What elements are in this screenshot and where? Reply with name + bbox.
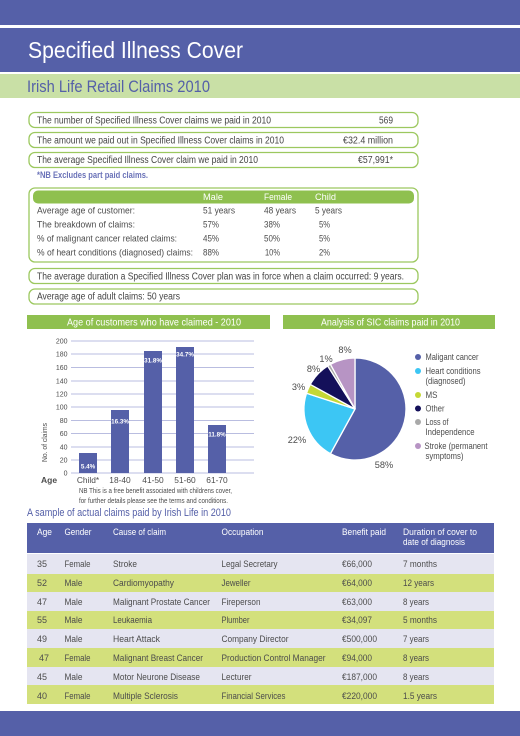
slice: stroke 8% xyxy=(330,358,355,409)
pie labels: 3% xyxy=(292,382,305,392)
row 6: Female xyxy=(64,653,90,664)
row 8: €220,000 xyxy=(342,691,377,702)
title banner: Specified Illness Cover xyxy=(28,37,243,63)
top decorative band xyxy=(0,0,520,25)
row 3: Fireperson xyxy=(222,597,260,608)
row: breakdown xyxy=(37,220,330,230)
bar chart note xyxy=(79,486,232,505)
stat: average adult age xyxy=(29,289,418,304)
stat: number of claims: 569 xyxy=(379,116,393,126)
stat: amount paid xyxy=(29,132,418,148)
row: average age xyxy=(37,206,342,216)
y axis labels: 40 xyxy=(60,444,68,452)
pie labels: 22% xyxy=(288,435,306,445)
row: average age: Average age of customer: xyxy=(37,206,135,216)
row 2: 52 xyxy=(37,578,47,589)
legend: heart conditions: Heart conditions xyxy=(426,366,481,377)
row 5 xyxy=(27,629,494,648)
y axis title: No. of claims xyxy=(42,423,49,462)
row 8: 1.5 years xyxy=(403,691,437,702)
row: malignant cancer: 45% xyxy=(203,234,219,244)
stat: average claim: €57,991* xyxy=(358,155,393,166)
table header bar: Female xyxy=(264,192,292,203)
row 8: Multiple Sclerosis xyxy=(113,691,178,702)
claims table xyxy=(27,523,494,704)
row: malignant cancer: 50% xyxy=(264,234,280,244)
legend: loss of independence xyxy=(415,417,474,438)
stat: average duration: The average duration a Specified Illness Cover plan was in force when a claim occurred: 9 years. xyxy=(37,272,404,282)
legend: MS: MS xyxy=(426,390,438,401)
row 5: €500,000 xyxy=(342,634,377,645)
x axis labels: 41-50 xyxy=(142,475,164,485)
legend: loss of independence: Independence xyxy=(426,427,474,438)
claims table heading: A sample of actual claims paid by Irish Life in 2010 xyxy=(27,507,231,519)
row: average age: 48 years xyxy=(264,206,296,216)
stat: average claim: The average Specified Illness Cover claim we paid in 2010 xyxy=(37,155,258,166)
pie labels xyxy=(288,345,393,470)
slice: malignant cancer 58% xyxy=(330,358,406,460)
row: heart conditions xyxy=(37,248,330,258)
row: breakdown: The breakdown of claims: xyxy=(37,220,135,230)
row 7: 45 xyxy=(37,672,47,683)
row: heart conditions: % of heart conditions (diagnosed) claims: xyxy=(37,248,193,258)
bar chart heading: Age of customers who have claimed - 2010 xyxy=(67,316,241,328)
row 7: Motor Neurone Disease xyxy=(113,672,200,683)
x axis labels: 18-40 xyxy=(109,475,131,485)
y axis labels: 140 xyxy=(56,378,68,386)
pie labels: 8% xyxy=(338,345,352,355)
slice: loss of independence 1% xyxy=(328,364,355,409)
row 5: 7 years xyxy=(403,634,429,645)
bar: 51-60 xyxy=(176,347,194,473)
legend: stroke: symptoms) xyxy=(426,451,464,462)
stat: average adult age: Average age of adult claims: 50 years xyxy=(37,292,180,302)
row 8: Female xyxy=(64,691,90,702)
x axis labels: Age xyxy=(41,475,57,485)
legend: heart conditions xyxy=(415,366,481,387)
bar: 41-50: 31.8% xyxy=(144,358,162,364)
bar: Child: 5.4% xyxy=(81,464,96,470)
y axis labels: 80 xyxy=(60,418,68,425)
row: heart conditions: 10% xyxy=(265,248,280,258)
slice: MS 3% xyxy=(306,384,355,409)
row 5: Company Director xyxy=(222,634,289,645)
legend: other: Other xyxy=(426,404,445,414)
x axis labels: 51-60 xyxy=(174,475,196,485)
row 1: 35 xyxy=(37,559,47,570)
row 3 xyxy=(27,592,494,611)
row: breakdown: 5% xyxy=(319,220,330,230)
stat: number of claims: The number of Specified Illness Cover claims we paid in 2010 xyxy=(37,116,271,126)
stat: number of claims xyxy=(29,112,418,128)
row 2: 12 years xyxy=(403,578,434,589)
row 4: €34,097 xyxy=(342,615,372,626)
row 7: Lecturer xyxy=(222,672,252,683)
footer band xyxy=(0,711,520,736)
legend: stroke: Stroke (permanent xyxy=(424,441,488,452)
legend: malignant cancer: Maligant cancer xyxy=(426,352,479,363)
row 6: Malignant Breast Cancer xyxy=(113,653,204,664)
row 7: Male xyxy=(64,672,82,683)
table header bar xyxy=(33,190,414,204)
pie chart heading: Analysis of SIC claims paid in 2010 xyxy=(321,316,460,328)
row 2: Jeweller xyxy=(222,578,251,589)
row 3: Malignant Prostate Cancer xyxy=(113,597,211,608)
row: heart conditions: 2% xyxy=(319,248,330,258)
x axis labels xyxy=(41,475,228,485)
row 3: 47 xyxy=(37,597,47,608)
y axis labels xyxy=(56,338,68,478)
row 1: €66,000 xyxy=(342,559,372,570)
row 6: 47 xyxy=(39,653,49,664)
bar: 18-40 xyxy=(111,410,129,473)
row: heart conditions: 88% xyxy=(203,248,219,258)
subtitle banner: Irish Life Retail Claims 2010 xyxy=(27,77,210,96)
row 7: 8 years xyxy=(403,672,429,683)
row 7 xyxy=(27,667,494,685)
row 5: Male xyxy=(64,634,82,645)
slice: heart conditions 22% xyxy=(304,393,355,454)
row: malignant cancer xyxy=(37,234,330,244)
footnote: *NB Excludes part paid claims. xyxy=(37,170,148,180)
table header: Duration of cover to xyxy=(403,527,477,538)
row 1: Stroke xyxy=(113,559,137,570)
bar chart note: NB This is a free benefit associated with childrens cover, xyxy=(79,486,232,495)
stat: average duration xyxy=(29,268,418,284)
row 3: €63,000 xyxy=(342,597,372,608)
row 3: Male xyxy=(64,597,82,608)
row 7: €187,000 xyxy=(342,672,377,683)
legend: stroke xyxy=(415,441,488,462)
y axis labels: 20 xyxy=(60,458,68,464)
row 1: Female xyxy=(64,559,90,570)
row: breakdown: 57% xyxy=(203,220,219,230)
row 5: Heart Attack xyxy=(113,634,160,645)
bar: 61-70: 11.8% xyxy=(208,432,226,438)
slice: other 8% xyxy=(310,366,355,409)
bar chart xyxy=(41,338,254,485)
row 2: Male xyxy=(64,578,82,589)
pie legend xyxy=(415,352,488,462)
row 6 xyxy=(27,648,494,667)
legend: loss of independence: Loss of xyxy=(426,417,449,428)
stat: amount paid: The amount we paid out in Specified Illness Cover claims in 2010 xyxy=(37,136,284,146)
pie labels: 8% xyxy=(307,364,320,374)
table header: date of diagnosis xyxy=(403,537,465,548)
row: average age: 5 years xyxy=(315,206,342,216)
table header: Age xyxy=(37,527,52,538)
row: malignant cancer: 5% xyxy=(319,234,330,244)
row 2: €64,000 xyxy=(342,578,372,589)
y axis labels: 0 xyxy=(64,470,68,478)
row 4: Male xyxy=(64,615,82,626)
row 2 xyxy=(27,574,494,592)
row 6: 8 years xyxy=(403,653,429,664)
y axis labels: 120 xyxy=(56,392,68,398)
row 3: 8 years xyxy=(403,597,429,608)
row 1: 7 months xyxy=(403,559,437,570)
bar: Child xyxy=(79,453,97,473)
bar: 61-70 xyxy=(208,425,226,473)
y axis labels: 100 xyxy=(56,404,68,412)
panel: demographic breakdown table xyxy=(29,188,418,262)
table header: Gender xyxy=(64,527,92,538)
row 6: €94,000 xyxy=(342,653,372,664)
y axis labels: 180 xyxy=(56,352,68,358)
legend: heart conditions: (diagnosed) xyxy=(426,376,466,387)
bar: 41-50 xyxy=(144,351,162,473)
pie labels: 58% xyxy=(375,460,393,470)
row 8: Financial Services xyxy=(222,691,286,702)
bar: 51-60: 34.7% xyxy=(176,352,194,358)
row 8: 40 xyxy=(37,691,47,702)
row 4: Leukaemia xyxy=(113,615,153,626)
row 4: 5 months xyxy=(403,615,437,626)
y axis labels: 200 xyxy=(56,338,68,346)
row 4: Plumber xyxy=(222,615,250,626)
table header bar: Male xyxy=(203,192,223,203)
stat: average claim xyxy=(29,152,418,168)
row 5: 49 xyxy=(37,634,47,645)
x axis labels: Child* xyxy=(77,475,100,485)
row 6: Production Control Manager xyxy=(222,653,326,664)
row 1 xyxy=(27,554,494,574)
bar: 18-40: 16.3% xyxy=(111,418,129,426)
row 2: Cardiomyopathy xyxy=(113,578,174,589)
row 1: Legal Secretary xyxy=(222,559,278,570)
pie chart xyxy=(304,358,406,460)
subtitle banner xyxy=(0,74,520,98)
row 4: 55 xyxy=(37,615,47,626)
row 4 xyxy=(27,611,494,629)
row: average age: 51 years xyxy=(203,206,235,216)
row 8 xyxy=(27,685,494,704)
table header: Occupation xyxy=(222,527,264,538)
table header: Cause of claim xyxy=(113,527,166,538)
table header xyxy=(27,523,494,553)
row: malignant cancer: % of malignant cancer related claims: xyxy=(37,234,177,244)
y axis labels: 160 xyxy=(56,365,68,372)
y axis labels: 60 xyxy=(60,431,68,438)
row: breakdown: 38% xyxy=(264,220,280,230)
title banner xyxy=(0,28,520,72)
pie labels: 1% xyxy=(319,354,333,364)
bar chart note: for further details please see the terms and conditions. xyxy=(79,496,228,505)
x axis labels: 61-70 xyxy=(206,475,228,485)
stat: amount paid: €32.4 million xyxy=(343,136,393,146)
pie chart heading xyxy=(283,315,495,329)
table header bar: Child xyxy=(315,192,336,203)
table header: Benefit paid xyxy=(342,527,386,538)
